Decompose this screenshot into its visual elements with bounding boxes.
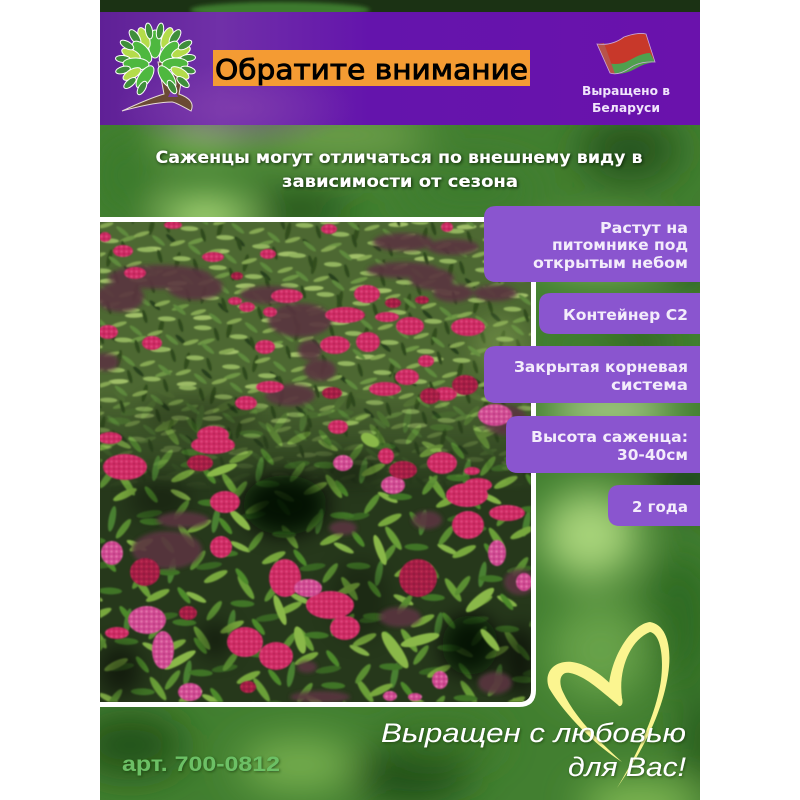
pill: container C2: Контейнер С2 bbox=[563, 306, 688, 324]
pill: open-air nursery: открытым небом bbox=[533, 254, 688, 272]
pill: seedling height: Высота саженца: bbox=[531, 428, 688, 446]
brown seed heads bbox=[91, 233, 536, 703]
pill: closed root system bbox=[484, 346, 700, 403]
darker recesses bbox=[100, 395, 536, 695]
pill: seedling height: 30-40см bbox=[617, 446, 688, 464]
pill: container C2 bbox=[539, 293, 700, 334]
pill: 2 years: 2 года bbox=[632, 498, 688, 516]
icon: tree logo bbox=[115, 23, 196, 111]
pill: open-air nursery bbox=[484, 206, 700, 282]
slogan: для Вас! bbox=[568, 752, 687, 782]
pill: closed root system: система bbox=[611, 376, 688, 394]
photo frame bbox=[100, 217, 536, 707]
text: grown in Belarus: Беларуси bbox=[592, 101, 660, 115]
icon: Belarus flag bbox=[597, 33, 655, 74]
pill: open-air nursery: питомнике под bbox=[552, 236, 688, 254]
photo: spirea bush bbox=[91, 221, 536, 703]
subtitle bbox=[156, 148, 643, 192]
slogan: Выращен с любовью bbox=[381, 718, 686, 748]
infographic canvas bbox=[100, 0, 700, 800]
article number: арт. 700-0812 bbox=[122, 753, 280, 776]
subtitle: зависимости от сезона bbox=[282, 172, 518, 192]
heading: Обратите внимание: Обратите внимание bbox=[215, 53, 528, 86]
pill: open-air nursery: Растут на bbox=[600, 219, 688, 237]
pill: closed root system: Закрытая корневая bbox=[514, 358, 688, 376]
pink flower clusters bbox=[98, 221, 525, 670]
dark top strip bbox=[100, 0, 700, 13]
subtitle: Саженцы могут отличаться по внешнему виду в bbox=[156, 148, 643, 168]
header band bbox=[100, 12, 700, 153]
upper bright foliage bbox=[100, 222, 531, 492]
pill: seedling height bbox=[506, 416, 700, 473]
text: grown in Belarus: Выращено в bbox=[582, 84, 670, 98]
text: grown in Belarus bbox=[582, 84, 670, 115]
pill: 2 years bbox=[608, 485, 700, 526]
icon: hand-drawn heart bbox=[547, 622, 669, 788]
bright foliage bbox=[162, 317, 526, 672]
slogan bbox=[381, 718, 687, 782]
